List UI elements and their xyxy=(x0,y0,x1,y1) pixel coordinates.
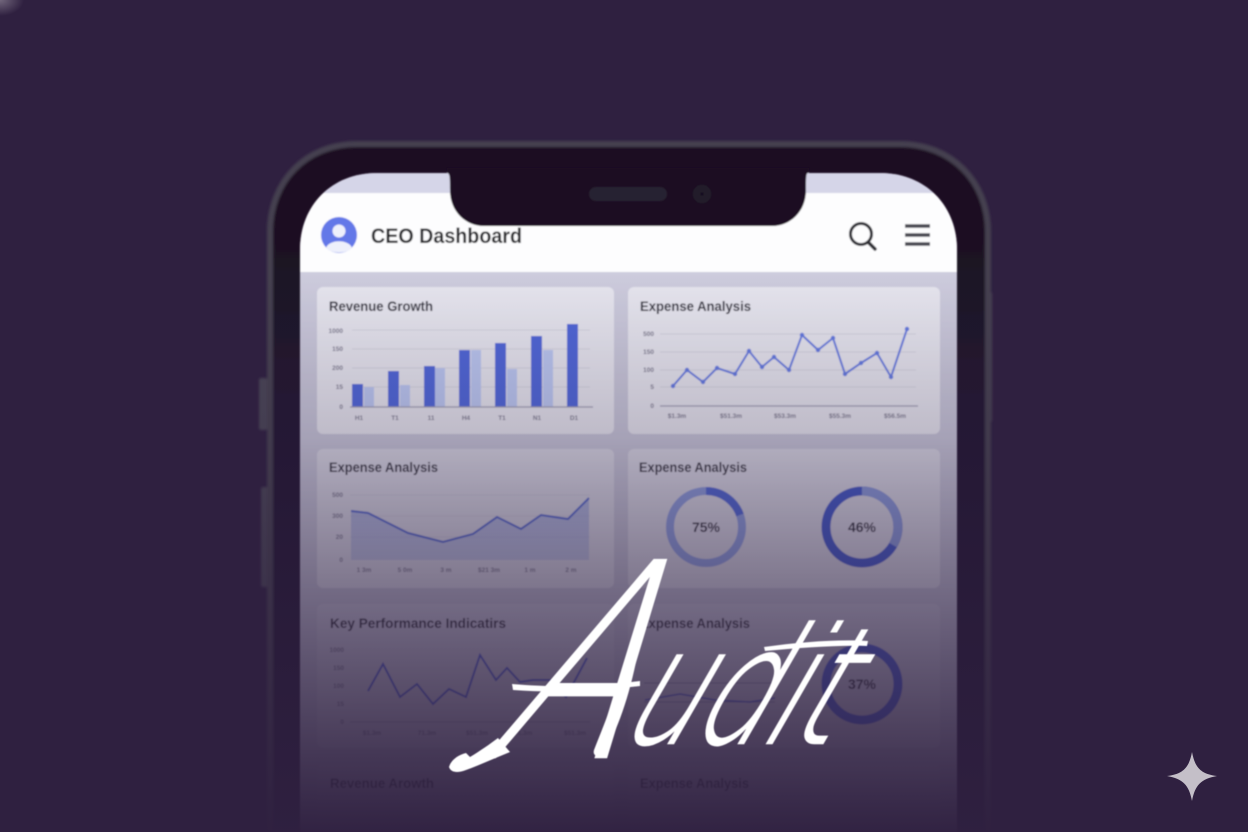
panel: expense analysis line: $53.3m xyxy=(774,413,796,420)
panel: revenue growth: D1 xyxy=(570,415,579,422)
panel: expense analysis area: 5 0m xyxy=(398,567,413,574)
panel: expense analysis area: 20 xyxy=(336,534,343,541)
panel: revenue growth: 0 xyxy=(339,404,343,411)
panel: key performance indicators: 100 xyxy=(333,683,344,690)
phone body xyxy=(270,144,988,832)
panel: expense analysis line: 150 xyxy=(643,349,654,356)
panel: key performance indicators: 15 xyxy=(337,701,344,708)
panel: expense analysis area xyxy=(317,449,614,588)
flourish: entry tail xyxy=(449,738,510,772)
panel: expense analysis line: 100 xyxy=(643,367,654,374)
panel: revenue growth: T1 xyxy=(498,415,506,422)
panel: expense analysis area: 3 m xyxy=(440,567,452,574)
panel: key performance indicators: $51.3m xyxy=(466,730,488,737)
donut 37% xyxy=(826,648,898,720)
panel: expense analysis with donut xyxy=(628,604,940,748)
flourish: t crossbar xyxy=(764,640,868,651)
panel: revenue growth: 150 xyxy=(332,346,343,353)
title: Audit xyxy=(443,508,962,821)
panel: revenue growth: H4 xyxy=(462,415,471,422)
notch xyxy=(447,168,809,226)
panel: expense analysis area: 0 xyxy=(339,557,343,564)
phone mockup xyxy=(259,144,992,832)
panel: expense analysis line: 5 xyxy=(650,384,654,391)
panel: revenue growth xyxy=(317,287,614,434)
donut 46% xyxy=(826,491,898,563)
panel: expense analysis area: $21 3m xyxy=(478,567,500,574)
panel: expense analysis line: Expense Analysis xyxy=(640,298,751,314)
audit lettering: A xyxy=(443,508,757,821)
line chart xyxy=(671,327,909,388)
panel: expense analysis line: 0 xyxy=(650,403,654,410)
phone rim xyxy=(270,144,988,832)
donut 75% xyxy=(670,491,742,563)
screen xyxy=(300,168,957,832)
speaker and camera xyxy=(589,185,711,203)
panel: revenue growth: H1 xyxy=(355,415,364,422)
panel: expense analysis line: $51.3m xyxy=(720,413,742,420)
status strip xyxy=(300,173,957,193)
line chart xyxy=(368,655,587,704)
flourish: downstroke swell xyxy=(594,640,640,756)
phone body and rim xyxy=(259,144,992,832)
panel: key performance indicators: 1.3m xyxy=(518,730,533,737)
panel: key performance indicators: 71.3m xyxy=(418,730,436,737)
panel: expense analysis line: $55.3m xyxy=(829,413,851,420)
panel: expense analysis donuts xyxy=(628,449,940,588)
panel: revenue growth: 11 xyxy=(428,415,435,422)
icon: user avatar xyxy=(321,217,357,253)
panel: expense analysis faded: Expense Analysis xyxy=(640,775,749,791)
panel: key performance indicators: $1.3m xyxy=(363,730,381,737)
panel: expense analysis area: 300 xyxy=(332,513,343,520)
icon: search xyxy=(850,224,875,249)
app header xyxy=(300,193,957,272)
panel: expense analysis area: 1 m xyxy=(524,567,536,574)
area chart xyxy=(351,498,589,560)
panel: key performance indicators: 0 xyxy=(340,719,344,726)
header title: CEO Dashboard xyxy=(371,225,522,248)
icon: menu xyxy=(905,226,930,244)
panel: expense analysis with donut: Expense Analysis xyxy=(640,615,750,631)
bar chart xyxy=(350,324,593,407)
panel: key performance indicators: 150 xyxy=(333,665,344,672)
panel: revenue growth: 1000 xyxy=(329,328,343,335)
panel: expense analysis area: Expense Analysis xyxy=(329,459,438,475)
donut 75%: 75% xyxy=(692,519,721,535)
panel: key performance indicators xyxy=(317,604,614,748)
panel: revenue growth faded: Revenue Arowth xyxy=(330,775,434,791)
donut 37%: 37% xyxy=(848,676,877,692)
panel: expense analysis donuts: Expense Analysis xyxy=(639,459,747,475)
icon: sparkle xyxy=(1167,752,1217,801)
panel: expense analysis area: 2 m xyxy=(565,567,577,574)
side buttons xyxy=(259,292,992,587)
panel: revenue growth: 15 xyxy=(336,384,343,391)
panel: key performance indicators: 1000 xyxy=(330,647,344,654)
donut 46%: 46% xyxy=(848,519,877,535)
fade overlay xyxy=(240,270,1020,832)
panel: expense analysis area: 1 3m xyxy=(357,567,372,574)
audit lettering: udit xyxy=(592,595,911,781)
panel: revenue growth: T1 xyxy=(391,415,399,422)
panel: expense analysis line: $1.3m xyxy=(668,413,686,420)
panel: expense analysis line: 500 xyxy=(643,331,654,338)
panel: expense analysis area: 500 xyxy=(332,492,343,499)
panel: expense analysis line xyxy=(628,287,940,434)
panel: revenue growth: N1 xyxy=(533,415,542,422)
panel: revenue growth faded xyxy=(317,764,614,832)
panel: expense analysis line: $56.5m xyxy=(884,413,906,420)
panel: key performance indicators: Key Performance Indicatirs xyxy=(330,615,506,631)
panel: revenue growth: Revenue Growth xyxy=(329,298,433,314)
background glow xyxy=(0,0,24,16)
panel: revenue growth: 200 xyxy=(332,365,343,372)
flourish: crossbar xyxy=(512,681,640,691)
panel: key performance indicators: $51.3m xyxy=(564,730,586,737)
panel: expense analysis faded xyxy=(628,764,940,832)
